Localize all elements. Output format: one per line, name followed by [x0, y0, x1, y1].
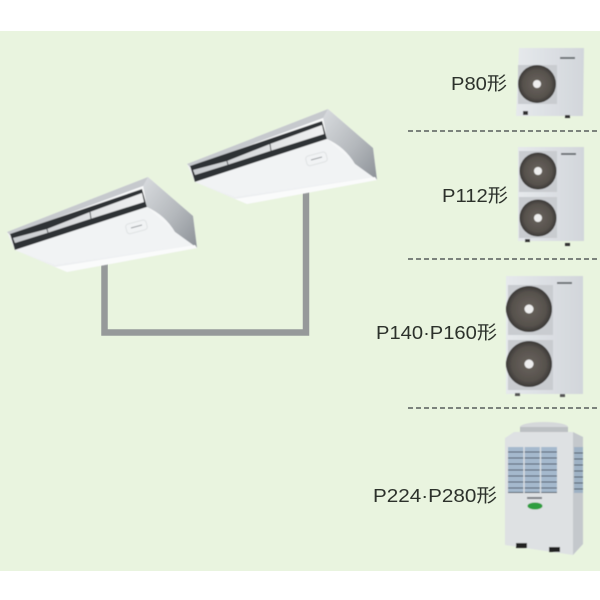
divider: P140 / P224	[408, 407, 600, 409]
row: P112	[442, 147, 584, 246]
outdoor unit: P224 P280	[505, 422, 583, 555]
divider: P80 / P112	[408, 130, 600, 132]
connecting refrigerant pipe	[104, 192, 306, 332]
row: P80	[451, 48, 584, 118]
label: P224 P280: P224·P280形	[373, 485, 497, 506]
divider: P112 / P140	[408, 258, 600, 260]
row: P140 P160	[376, 276, 583, 397]
label: P80: P80形	[451, 73, 507, 94]
row: P224 P280	[373, 422, 583, 555]
label: P140 P160: P140·P160形	[376, 322, 497, 343]
outdoor unit: P112	[518, 147, 584, 246]
outdoor unit: P140 P160	[506, 276, 583, 397]
label: P112: P112形	[442, 185, 508, 206]
indoor ceiling unit, left	[7, 177, 197, 272]
outdoor unit: P80	[516, 48, 584, 118]
indoor ceiling unit, right	[187, 109, 377, 204]
